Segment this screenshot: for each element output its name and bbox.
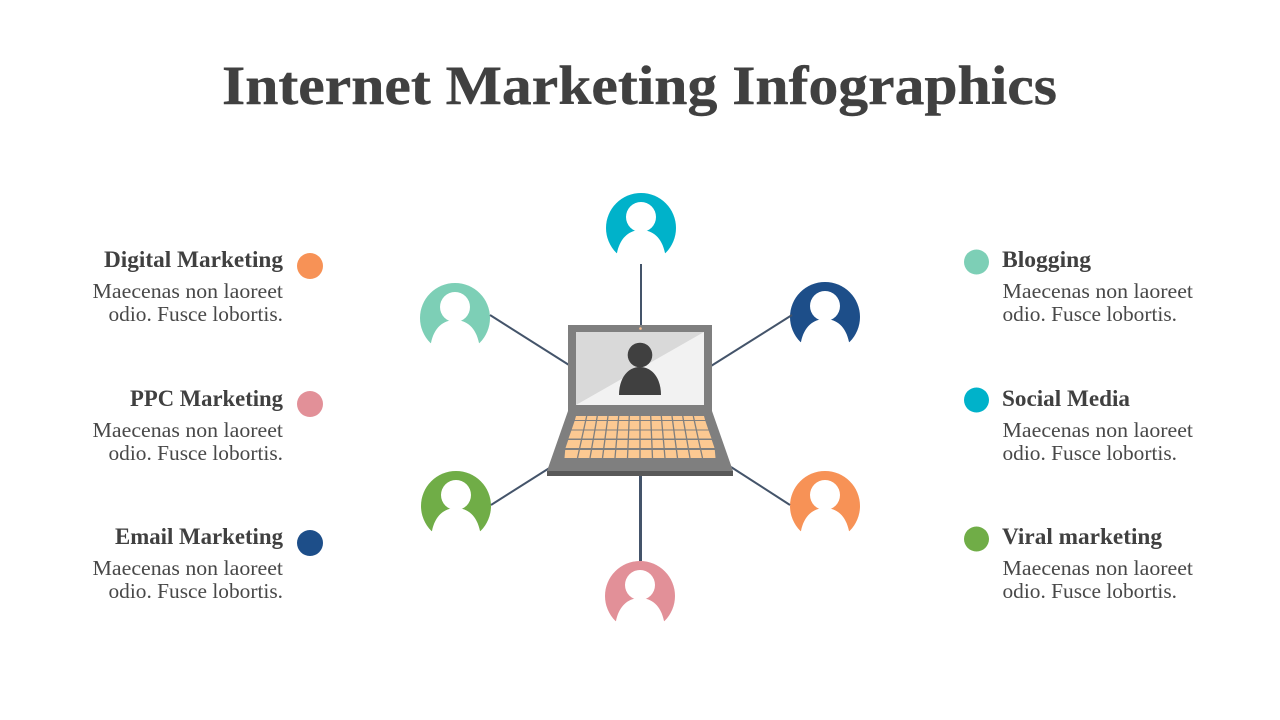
icon: user mint [420, 283, 490, 354]
panel: PPC Marketing [92, 386, 323, 465]
panel: Viral marketing: odio. Fusce lobortis. [1002, 579, 1177, 603]
panel: Digital Marketing: odio. Fusce lobortis. [108, 302, 283, 326]
panel: Social Media: odio. Fusce lobortis. [1002, 441, 1177, 465]
panel: Digital Marketing [92, 247, 323, 326]
connector lines [490, 264, 792, 561]
panel: Blogging: Blogging [1002, 247, 1092, 272]
panel: Viral marketing: Viral marketing [1002, 524, 1162, 549]
panel: Digital Marketing: Maecenas non laoreet [92, 279, 283, 303]
panel: Digital Marketing: Digital Marketing [104, 247, 283, 272]
panel: Blogging: Maecenas non laoreet [1002, 279, 1193, 303]
icon: user pink [605, 561, 675, 632]
panel: Social Media: Maecenas non laoreet [1002, 418, 1193, 442]
panel: Viral marketing [964, 524, 1193, 603]
panel: PPC Marketing: odio. Fusce lobortis. [108, 441, 283, 465]
panel: Social Media: Social Media [1002, 386, 1130, 411]
icon: user green [421, 471, 491, 542]
panel: Email Marketing: odio. Fusce lobortis. [108, 579, 283, 603]
icon: user teal top [606, 193, 676, 264]
title: Internet Marketing Infographics [222, 55, 1057, 116]
panel: Email Marketing: Maecenas non laoreet [92, 556, 283, 580]
icon: user navy [790, 282, 860, 353]
icon: user orange [790, 471, 860, 542]
panel: Email Marketing [92, 524, 323, 603]
panel: Email Marketing: Email Marketing [115, 524, 283, 549]
icon: laptop [547, 325, 733, 476]
panel: PPC Marketing: Maecenas non laoreet [92, 418, 283, 442]
panel: Blogging [964, 247, 1193, 326]
panel: Social Media [964, 386, 1193, 465]
panel: PPC Marketing: PPC Marketing [130, 386, 283, 411]
panel: Viral marketing: Maecenas non laoreet [1002, 556, 1193, 580]
panel: Blogging: odio. Fusce lobortis. [1002, 302, 1177, 326]
